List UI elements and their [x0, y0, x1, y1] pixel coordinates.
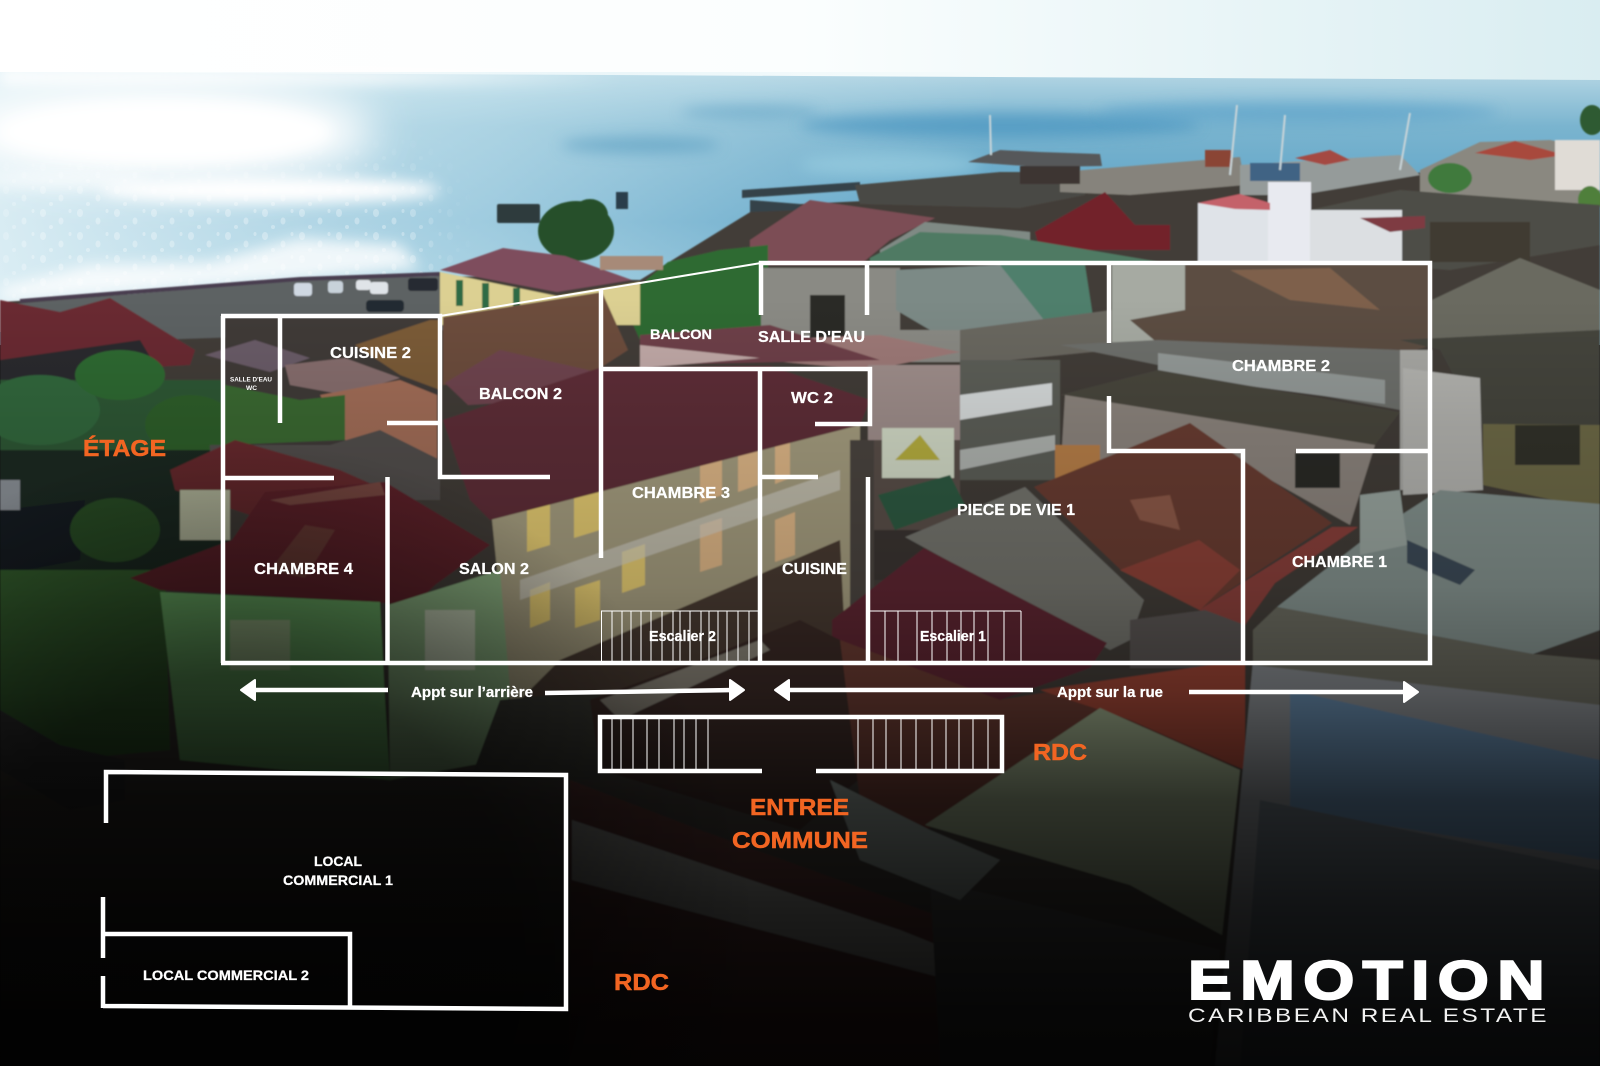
darker lower-left corner: [0, 440, 800, 1066]
stairs 2: [601, 611, 760, 661]
shoreline and car park: [0, 274, 450, 345]
walls: [103, 772, 566, 1009]
large tree behind the plan: [622, 245, 768, 340]
room labels: [143, 327, 1387, 983]
label salle d'eau wc small: SALLE D'EAU: [230, 376, 272, 384]
label pièce de vie 1: PIECE DE VIE 1: [957, 502, 1075, 519]
diagonal roof line: [440, 263, 761, 316]
heading entrée commune: COMMUNE: [732, 827, 868, 853]
label escalier 2: Escalier 2: [649, 629, 716, 645]
upper town roofs: [750, 182, 1530, 265]
main building facade: [490, 400, 860, 700]
label appt sur la rue: Appt sur la rue: [1057, 685, 1163, 701]
label chambre 1: CHAMBRE 1: [1292, 554, 1387, 571]
pier, quay and harbour: [497, 105, 1420, 223]
heading étage: ÉTAGE: [83, 434, 166, 461]
green metal roof: [925, 708, 1240, 935]
stairs left and right: [612, 719, 988, 769]
label appt sur l'arrière: Appt sur l’arrière: [411, 685, 533, 701]
stairs 1: [868, 611, 1021, 661]
rust roofs centre right: [832, 423, 1358, 700]
label balcon 2: BALCON 2: [479, 386, 562, 403]
lower centre building: [570, 780, 1220, 1066]
left trees and hillside: [0, 350, 235, 810]
big flat-roof building: [1215, 490, 1600, 1066]
label salon 2: SALON 2: [459, 561, 529, 578]
arrow left: [775, 680, 1033, 700]
floor plan: locaux commerciaux: [103, 772, 566, 1009]
heading rdc upper: RDC: [1033, 739, 1087, 765]
label chambre 4: CHAMBRE 4: [254, 561, 353, 578]
label cuisine: CUISINE: [782, 561, 847, 578]
street under facade: [470, 690, 600, 780]
buildings right of centre: [640, 265, 1185, 620]
label chambre 2: CHAMBRE 2: [1232, 358, 1330, 375]
label local commercial 1: [283, 853, 393, 888]
heading entrée commune: [732, 794, 868, 853]
label salle d'eau wc small: WC: [246, 385, 257, 392]
sea: [0, 72, 1600, 345]
label cuisine 2: CUISINE 2: [330, 345, 411, 362]
main maroon roof: [443, 366, 870, 520]
tree on shore: [538, 199, 614, 261]
heading rdc lower: RDC: [614, 969, 669, 995]
brown and maroon roofs: [443, 292, 628, 405]
label wc 2: WC 2: [791, 390, 833, 407]
far right coastal buildings: [1310, 105, 1600, 270]
arrow left: [241, 680, 388, 700]
arrows: appt sur l'arrière: [241, 680, 744, 700]
logo tagline: CARIBBEAN REAL ESTATE: [1188, 1005, 1549, 1027]
centre street buildings: [590, 620, 1245, 830]
orange section headings: [83, 434, 1087, 995]
label chambre 3: CHAMBRE 3: [632, 485, 730, 502]
label escalier 1: Escalier 1: [920, 629, 986, 645]
sky: [0, 0, 1600, 82]
chambre 4 roofs and green wall: [130, 440, 510, 780]
logo wordmark: EMOTION: [1188, 949, 1553, 1011]
floor plan: entrée commune RDC: [600, 717, 1002, 771]
sun glare on the sea: [0, 70, 1500, 305]
label local commercial 1: COMMERCIAL 1: [283, 872, 393, 888]
arrow right: [1189, 682, 1418, 702]
floor plan: étage: [221, 263, 1430, 663]
yellow building with roof: [440, 248, 663, 325]
dark rooftops of Chambre 2 area: [1055, 265, 1432, 525]
label local commercial 2: LOCAL COMMERCIAL 2: [143, 967, 309, 983]
left block rooftops (inside Étage plan): [205, 318, 440, 500]
label salle d'eau: SALLE D'EAU: [758, 329, 865, 346]
label balcon: BALCON: [650, 327, 712, 342]
label local commercial 1: LOCAL: [314, 853, 362, 869]
heading entrée commune: ENTREE: [750, 794, 849, 820]
walls: étage: [221, 263, 1430, 663]
arrows: appt sur la rue: [775, 680, 1418, 702]
top-left red roofs: [0, 298, 195, 375]
arrow right: [545, 680, 744, 700]
walls: [600, 717, 1002, 771]
label salle d'eau wc small: [230, 376, 272, 392]
right buildings beyond plan: [1400, 258, 1600, 510]
logo: emotion caribbean real estate: [1188, 949, 1553, 1027]
